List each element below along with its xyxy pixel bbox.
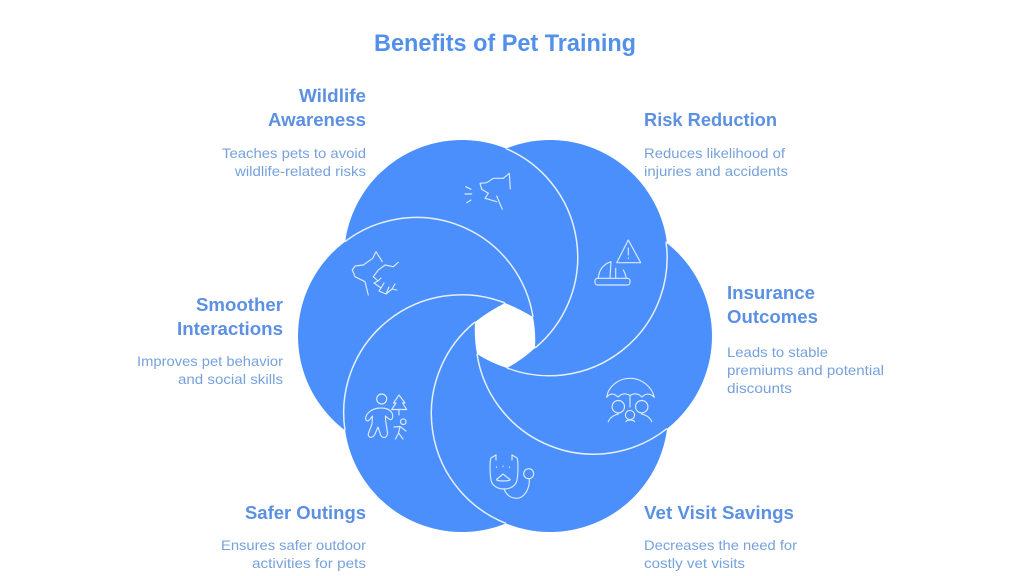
heading: Insurance — [727, 282, 815, 303]
petal separators — [344, 149, 667, 523]
icon: warning triangle and boat — [595, 240, 641, 285]
description line 2: injuries and accidents — [644, 163, 788, 179]
heading: Wildlife — [299, 85, 366, 106]
icon: dog head and stethoscope — [490, 455, 534, 498]
label: safer outings — [221, 502, 366, 571]
description: Improves pet behavior — [137, 353, 283, 369]
description line 2: costly vet visits — [644, 555, 745, 571]
description: Leads to stable — [727, 344, 828, 360]
icon: barking dog — [465, 173, 510, 209]
icon: dog and hand — [352, 252, 398, 295]
label: smoother interactions — [137, 294, 283, 387]
description: Decreases the need for — [644, 537, 797, 553]
description: Reduces likelihood of — [644, 145, 785, 161]
description line 2: and social skills — [178, 371, 283, 387]
petal: risk reduction — [432, 140, 668, 376]
petal: safer outings — [344, 296, 580, 532]
petal: vet visit savings — [432, 296, 668, 532]
title: Benefits of Pet Training — [374, 30, 636, 57]
label: wildlife awareness — [222, 85, 366, 179]
petal: smoother interactions — [298, 218, 534, 454]
heading line 2: Outcomes — [727, 306, 818, 327]
heading line 2: Interactions — [177, 318, 283, 339]
petal: insurance outcomes — [476, 218, 712, 454]
label: risk reduction — [644, 109, 788, 179]
heading: Safer Outings — [245, 502, 366, 523]
icon: person, tree and child — [366, 394, 407, 439]
description line 3: discounts — [727, 380, 792, 396]
description: Ensures safer outdoor — [221, 537, 366, 553]
description: Teaches pets to avoid — [222, 145, 366, 161]
label: insurance outcomes — [727, 282, 884, 396]
flower diagram — [298, 140, 712, 532]
center hole — [475, 303, 535, 368]
petal: wildlife awareness — [344, 140, 580, 376]
description line 2: wildlife-related risks — [234, 163, 366, 179]
description line 2: premiums and potential — [727, 362, 884, 378]
icon: family under umbrella — [607, 378, 654, 422]
description line 2: activities for pets — [252, 555, 366, 571]
heading: Risk Reduction — [644, 109, 777, 130]
heading line 2: Awareness — [268, 109, 366, 130]
label: vet visit savings — [644, 502, 797, 571]
heading: Smoother — [196, 294, 283, 315]
heading: Vet Visit Savings — [644, 502, 794, 523]
